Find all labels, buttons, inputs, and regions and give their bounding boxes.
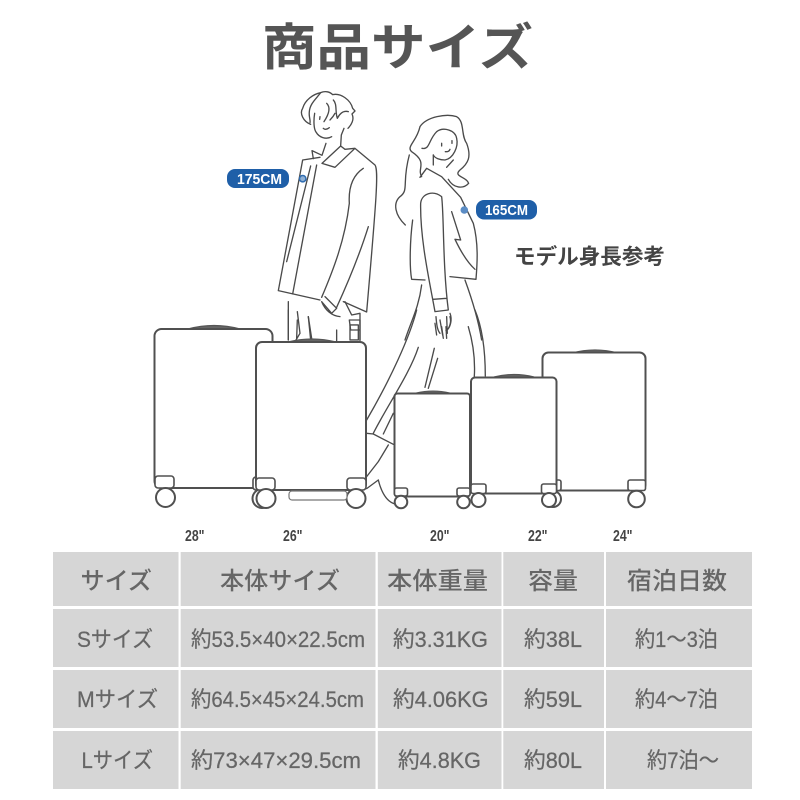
height label: 175CM: 175CM: [237, 171, 282, 188]
luggage 22 inch: [471, 374, 556, 507]
luggage 24 inch: [542, 350, 646, 507]
luggage size labels: 28": [185, 528, 204, 545]
illustration: woman figure: [396, 115, 482, 340]
illustration: lower legs and skirt: [288, 310, 485, 504]
table row: L size: 約80L: [524, 748, 582, 773]
table row: S size: [53, 609, 752, 667]
table row: L size: Lサイズ: [82, 748, 153, 773]
luggage 26 inch: [252, 339, 366, 508]
luggage 20 inch: [394, 391, 470, 508]
height label: 165CM: 165CM: [485, 202, 528, 219]
table row: S size: Sサイズ: [77, 627, 153, 652]
luggage size labels: 26": [283, 528, 302, 545]
table row: L size: [53, 731, 752, 789]
table row: L size: 約4.8KG: [398, 748, 481, 773]
table header row: [53, 552, 752, 606]
table row: S size: 約53.5×40×22.5cm: [191, 627, 365, 652]
table row: L size: 約73×47×29.5cm: [191, 748, 361, 773]
table row: M size: 約4.06KG: [393, 687, 488, 712]
table row: M size: [53, 670, 752, 728]
table row: S size: 約1～3泊: [635, 627, 718, 652]
table row: L size: 約7泊～: [647, 748, 719, 773]
title: 商品サイズ: [262, 20, 533, 76]
table row: M size: 約4～7泊: [635, 687, 718, 712]
table header row: 宿泊日数: [627, 568, 727, 595]
height label: 165CM: [460, 200, 537, 220]
table header row: 本体重量: [387, 568, 488, 595]
height label: 175CM: [227, 169, 306, 188]
luggage size labels: 22": [528, 528, 548, 545]
luggage size labels: [185, 528, 632, 545]
table row: M size: 約59L: [524, 687, 582, 712]
table row: M size: 約64.5×45×24.5cm: [191, 687, 364, 712]
table header row: サイズ: [80, 568, 152, 595]
size table: [53, 552, 752, 789]
table row: M size: Mサイズ: [77, 687, 158, 712]
luggage size labels: 24": [613, 528, 632, 545]
model height note: モデル身長参考: [514, 244, 665, 269]
table header row: 容量: [528, 568, 578, 595]
table row: S size: 約3.31KG: [393, 627, 488, 652]
table header row: 本体サイズ: [220, 568, 340, 595]
luggage 28 inch: [154, 326, 272, 507]
table row: S size: 約38L: [524, 627, 582, 652]
luggage size labels: 20": [430, 528, 450, 545]
illustration: man figure: [278, 92, 377, 340]
